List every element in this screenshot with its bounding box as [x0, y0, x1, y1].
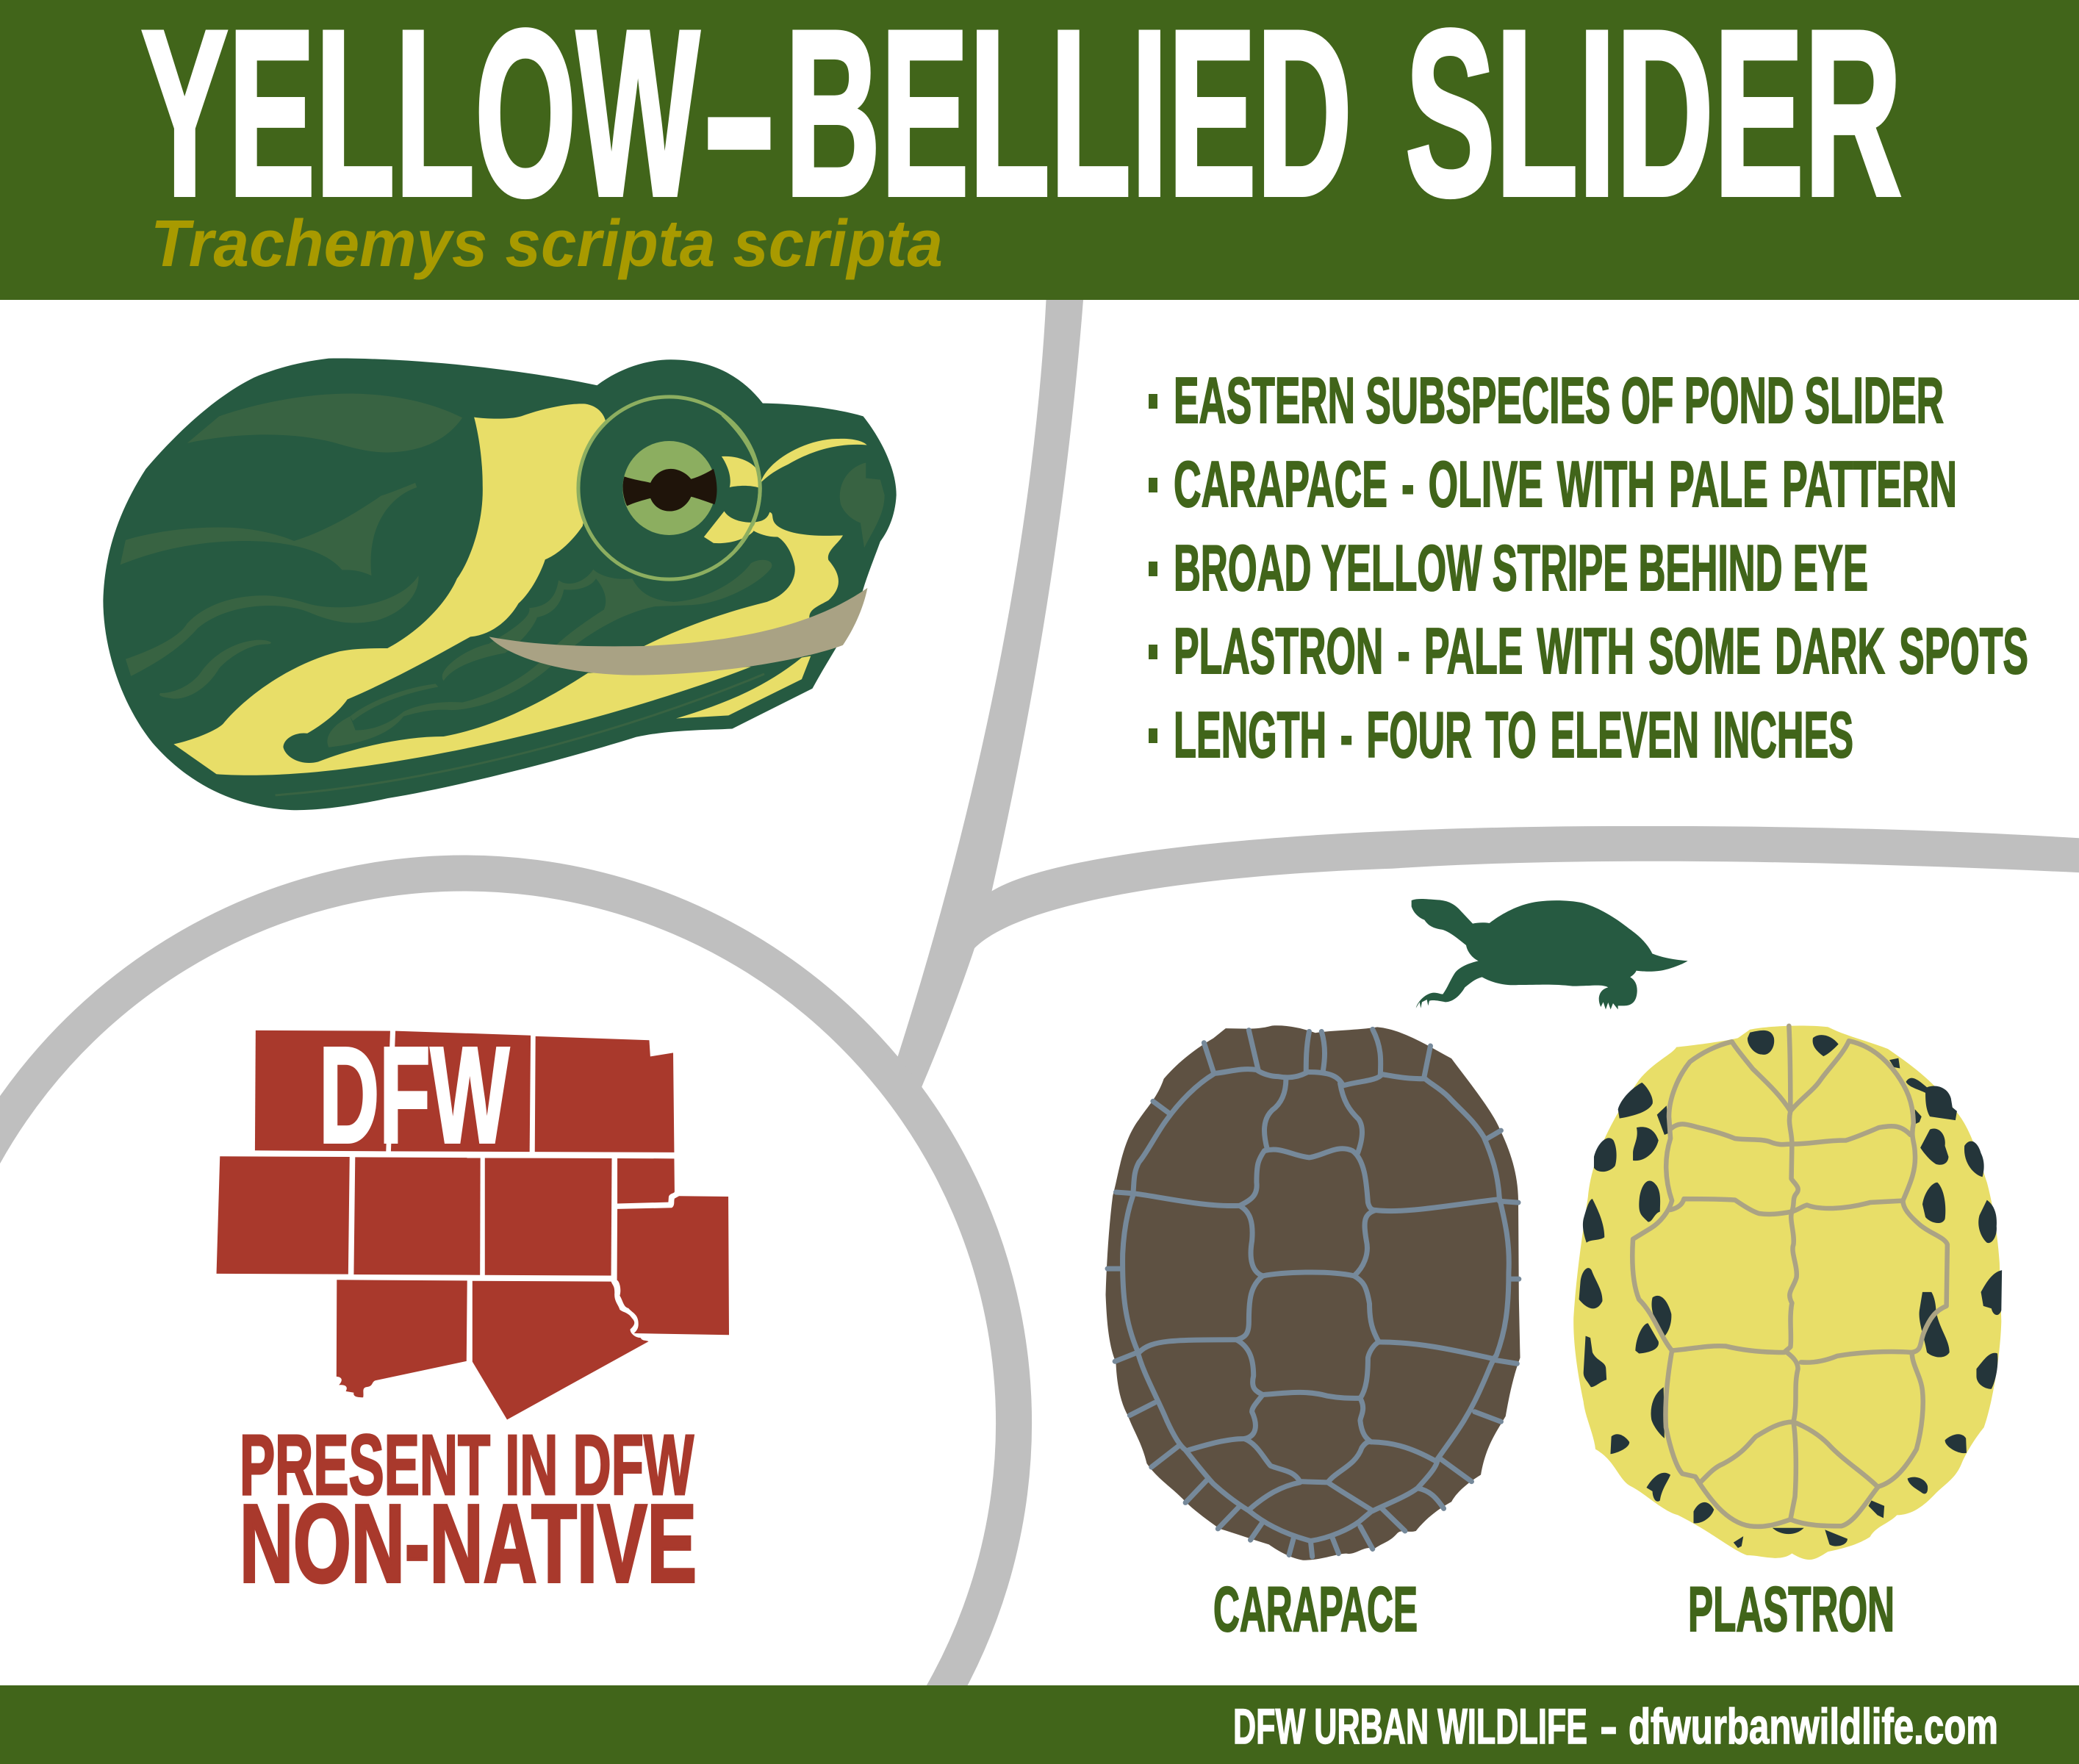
icon: turtle silhouette — [1412, 899, 1688, 1009]
header banner — [0, 0, 2079, 300]
eye — [622, 441, 717, 535]
illustration: plastron — [1573, 1026, 2002, 1560]
illustration: turtle head — [103, 359, 897, 810]
status: non-native: NON-NATIVE — [240, 1481, 697, 1605]
footer banner — [0, 1685, 2079, 1764]
fact list — [1149, 364, 2028, 771]
label: plastron: PLASTRON — [1688, 1574, 1895, 1645]
illustration: carapace — [1106, 1025, 1520, 1560]
footer credit: - — [1600, 1699, 1617, 1754]
map label: DFW — [319, 1019, 509, 1172]
label: carapace: CARAPACE — [1213, 1574, 1418, 1645]
status: present in DFW: PRESENT IN DFW — [240, 1417, 694, 1513]
DFW county map — [217, 1019, 729, 1419]
footer credit: DFW URBAN WILDLIFE — [1233, 1699, 1587, 1754]
title — [141, 0, 1902, 245]
scientific name: Trachemys scripta scripta — [151, 207, 943, 281]
